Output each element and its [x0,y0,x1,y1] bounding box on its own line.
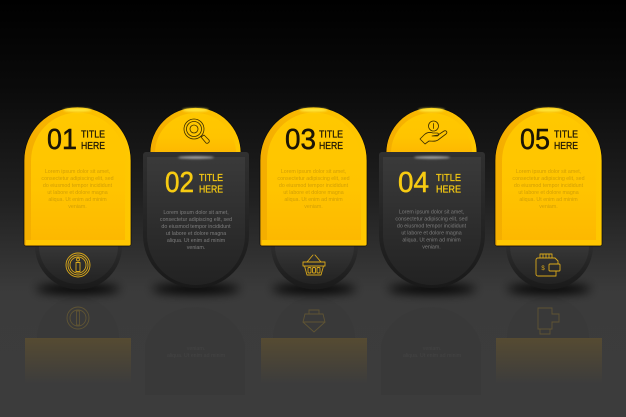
title [319,130,343,152]
body text [512,169,585,210]
title: TITLE [319,130,343,140]
body text: Lorem ipsum dolor sit amet, [281,169,346,175]
body text: veniam. [304,204,323,210]
body text: ut labore et dolore magna [283,190,344,196]
icon: wallet [536,254,560,276]
panel: step 02 [143,108,249,288]
title [199,173,223,196]
number: 02 [165,167,194,199]
body text: ut labore et dolore magna [166,231,226,237]
body text: ut labore et dolore magna [518,190,579,196]
panel: step 01 [24,107,131,290]
reflection: card 2: aliqua. Ut enim ad minim [167,353,226,359]
yellow card [495,107,602,246]
body text: consectetur adipiscing elit, sed [277,176,350,182]
title: HERE [199,184,223,196]
body text: do eiusmod tempor incididunt [43,183,113,189]
body text: Lorem ipsum dolor sit amet, [399,210,464,216]
title: HERE [436,184,461,196]
body text: do eiusmod tempor incididunt [279,183,349,189]
reflection: floor [25,297,602,395]
body text [277,169,350,210]
title: TITLE [81,130,105,140]
body text: aliqua. Ut enim ad minim [402,238,461,244]
number: 04 [398,167,429,199]
body text: veniam. [422,244,441,250]
reflection: card 4 [381,307,481,395]
body text: aliqua. Ut enim ad minim [48,197,107,203]
bottom pill [35,240,122,290]
title: TITLE [436,173,461,184]
bottom pill [506,240,593,290]
body text [160,210,232,251]
yellow cap [386,108,477,153]
body text: Lorem ipsum dolor sit amet, [45,169,110,175]
title [554,130,578,152]
body text [41,169,114,210]
body text: aliqua. Ut enim ad minim [284,197,343,203]
dark card [379,152,485,288]
panel: step 03 [260,107,367,290]
panel: step 05 [495,107,602,290]
dark card [143,152,249,288]
icon: hand with coin [420,121,447,144]
body text: veniam. [539,204,558,210]
number: 03 [285,124,316,156]
reflection: card 2: veniam. [187,346,205,352]
body text: aliqua. Ut enim ad minim [519,197,578,203]
bottom pill [271,240,358,290]
icon: magnifier [184,119,209,143]
panel: step 04 [379,108,485,288]
title: HERE [319,141,343,152]
reflection: card 1 [25,297,131,384]
body text: consectetur adipiscing elit, sed [512,176,585,182]
title: TITLE [554,130,578,140]
title [81,130,105,152]
body text: Lorem ipsum dolor sit amet, [163,210,229,216]
body text: do eiusmod tempor incididunt [161,224,231,230]
shadows under cards [36,284,591,294]
reflection: card 2 [145,307,245,395]
number: 01 [47,124,77,156]
icon: wallet: $ [541,266,545,272]
title: TITLE [199,173,223,184]
body text: consectetur adipiscing elit, sed [160,217,232,223]
title [436,173,461,196]
title: HERE [554,141,578,152]
reflection: card 3 [261,297,367,384]
title: HERE [81,141,105,152]
body text: veniam. [187,245,205,251]
reflection: card 4: veniam. [423,346,441,352]
body text: Lorem ipsum dolor sit amet, [516,169,581,175]
body text: do eiusmod tempor incididunt [397,224,467,230]
body text: aliqua. Ut enim ad minim [167,238,226,244]
reflection: card 4: aliqua. Ut enim ad minim [403,353,462,359]
body text: consectetur adipiscing elit, sed [41,176,114,182]
body text: consectetur adipiscing elit, sed [395,216,468,222]
reflection: card 5 [496,297,602,384]
yellow card [260,107,367,246]
body text: veniam. [68,204,87,210]
body text [395,210,468,250]
body text: ut labore et dolore magna [47,190,108,196]
yellow cap [150,108,241,153]
number: 05 [520,124,550,156]
body text: ut labore et dolore magna [401,230,462,236]
icon: basket [303,255,325,275]
icon: info [66,253,90,277]
yellow card [24,107,131,246]
body text: do eiusmod tempor incididunt [514,183,584,189]
